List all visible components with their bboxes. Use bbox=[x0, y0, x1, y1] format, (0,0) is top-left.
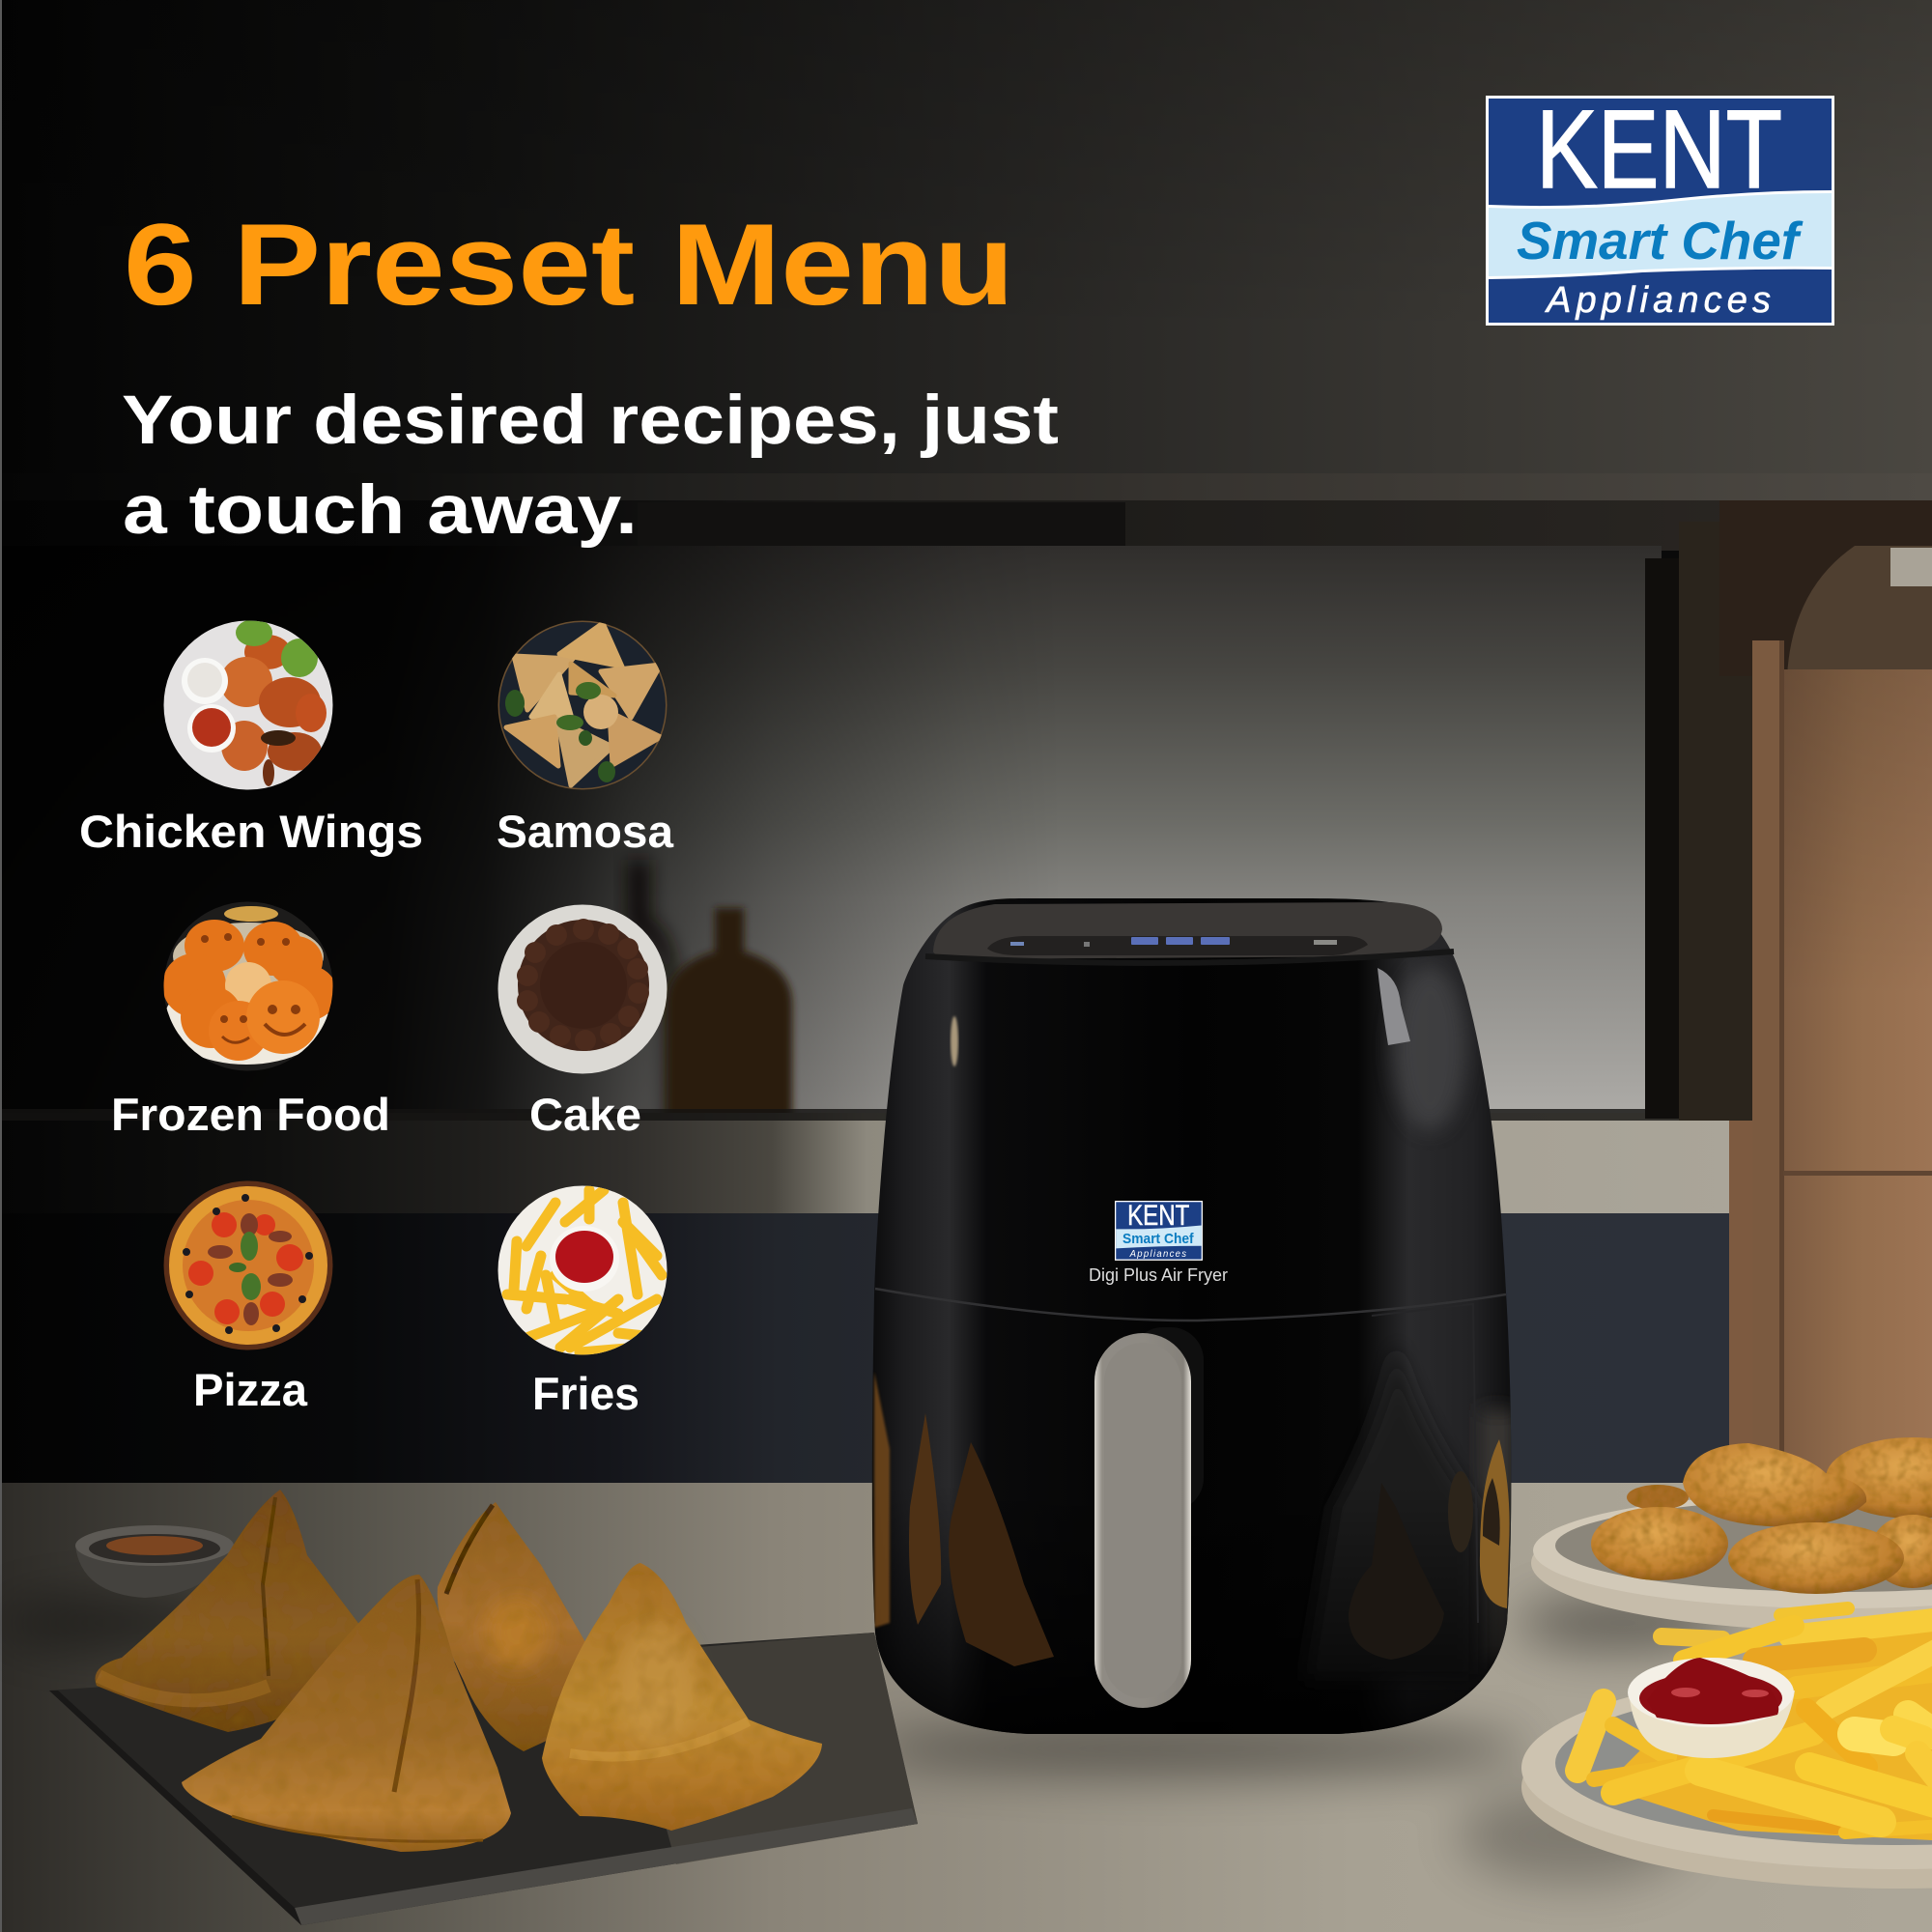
fryer handle bbox=[1094, 1327, 1204, 1708]
icon: fries plate bbox=[497, 1185, 668, 1355]
brand logo bbox=[1486, 88, 1834, 326]
label: cake: Cake bbox=[529, 1089, 641, 1140]
icon: pizza bbox=[163, 1180, 333, 1350]
menu item: cake bbox=[497, 904, 668, 1140]
control panel bbox=[987, 936, 1368, 955]
nugget plate bbox=[1531, 1437, 1932, 1631]
nuggets bbox=[1591, 1437, 1932, 1594]
fryer reflections bbox=[869, 889, 1517, 1739]
fries bbox=[1577, 1608, 1932, 1840]
blurred bottles on shelf bbox=[628, 860, 676, 1130]
subtitle line one: Your desired recipes, just bbox=[122, 383, 1059, 459]
fryer lid bbox=[933, 902, 1442, 959]
brand logo: Appliances bbox=[1545, 280, 1771, 321]
label: pizza: Pizza bbox=[193, 1364, 308, 1415]
fryer mini logo: KENT bbox=[1127, 1200, 1189, 1232]
brand logo: Smart Chef bbox=[1517, 211, 1804, 270]
fryer mini logo: Appliances bbox=[1129, 1249, 1186, 1260]
title: 6 Preset Menu bbox=[124, 200, 1014, 329]
samosas bbox=[95, 1490, 822, 1852]
menu item: fries bbox=[497, 1185, 668, 1419]
menu item: frozen food bbox=[111, 901, 390, 1140]
fries plate bbox=[1521, 1608, 1932, 1889]
fryer mini logo: Smart Chef bbox=[1122, 1232, 1194, 1247]
menu item: samosa bbox=[497, 620, 674, 857]
samosa: back centre bbox=[438, 1502, 585, 1751]
samosa: front right bbox=[542, 1563, 822, 1831]
label: fries: Fries bbox=[532, 1368, 639, 1419]
brand logo: KENT bbox=[1536, 88, 1782, 212]
icon: smiley potato plate bbox=[162, 901, 337, 1071]
air fryer bbox=[869, 889, 1517, 1739]
label: chicken wings: Chicken Wings bbox=[79, 806, 423, 857]
fryer seam bbox=[875, 1289, 1506, 1321]
slate board bbox=[49, 1633, 918, 1925]
icon: chocolate cake plate bbox=[497, 904, 668, 1074]
label: frozen food: Frozen Food bbox=[111, 1089, 390, 1140]
icon: chicken wings plate bbox=[163, 619, 333, 790]
menu item: chicken wings bbox=[79, 619, 423, 857]
ketchup cup bbox=[1628, 1658, 1795, 1758]
fryer body bbox=[872, 898, 1511, 1734]
label: samosa: Samosa bbox=[497, 806, 674, 857]
samosa: back left bbox=[95, 1490, 360, 1732]
counter shadows bbox=[0, 1596, 1729, 1884]
chutney bowl bbox=[75, 1525, 234, 1598]
fryer model name: Digi Plus Air Fryer bbox=[1089, 1265, 1228, 1285]
subtitle line two: a touch away. bbox=[123, 472, 638, 549]
menu item: pizza bbox=[163, 1180, 333, 1415]
icon: samosa plate bbox=[497, 620, 668, 790]
fryer mini logo bbox=[1115, 1200, 1203, 1261]
samosa: front left bbox=[182, 1575, 511, 1852]
